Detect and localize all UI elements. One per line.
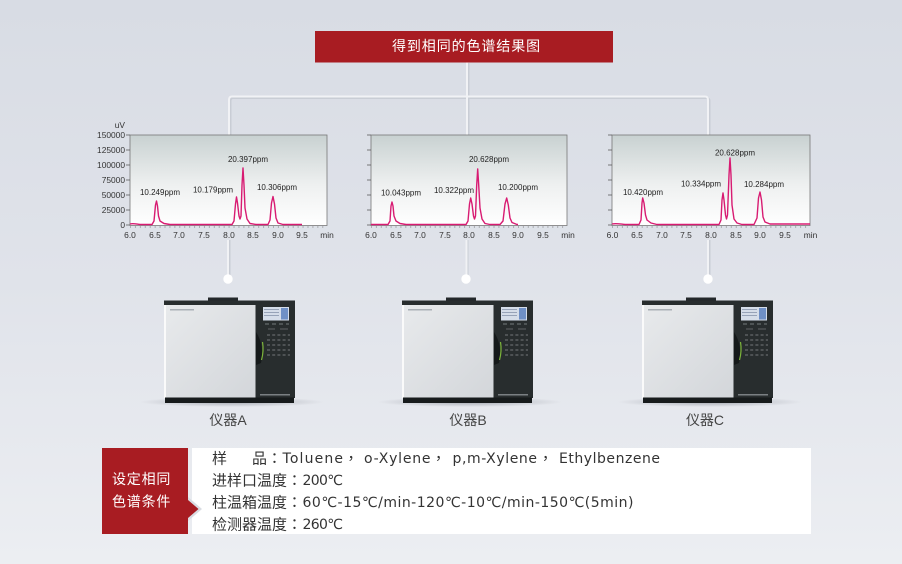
label B: 仪器B (449, 412, 487, 428)
chart B: min (561, 230, 575, 240)
chart C: 9.5 (779, 230, 791, 240)
instrument C (618, 298, 802, 407)
chart B: 10.322ppm (434, 186, 474, 195)
conditions rows: 260℃ (302, 517, 343, 533)
chart C: 9.0 (754, 230, 766, 240)
chart B: 8.0 (463, 230, 475, 240)
chart A: 10.249ppm (140, 188, 180, 197)
chart C (607, 135, 818, 240)
chart A: 8.0 (223, 230, 235, 240)
conditions rows: ， (431, 448, 446, 468)
chart C: 10.334ppm (681, 180, 721, 188)
title (315, 31, 613, 62)
chart A: 9.5 (296, 230, 308, 240)
chart A: 125000 (97, 145, 125, 155)
chart B: 9.0 (512, 230, 524, 240)
conditions rows: 检测器温度 (212, 516, 287, 534)
chart A: uV (115, 120, 125, 130)
chart A: 150000 (97, 130, 125, 140)
conditions rows: 品 (252, 450, 267, 468)
chart C: 20.628ppm (715, 148, 755, 158)
chart B (365, 135, 575, 240)
chart A: 100000 (97, 160, 125, 170)
conditions rows: ： (287, 470, 302, 490)
label A: 仪器A (209, 412, 247, 428)
chart B: 9.5 (537, 230, 549, 240)
conditions rows: 60℃-15℃/min-120℃-10℃/min-150℃(5min) (302, 495, 634, 511)
conditions rows: ， (344, 448, 359, 468)
chart C: min (804, 230, 818, 240)
conditions badge: 色谱条件 (112, 494, 171, 510)
chart B: 20.628ppm (469, 155, 509, 164)
conditions rows: ： (287, 492, 302, 512)
conditions rows: Ethylbenzene (559, 451, 660, 467)
chart A: 25000 (102, 205, 125, 215)
chart B: 6.5 (390, 230, 402, 240)
label C: 仪器C (686, 412, 724, 428)
conditions rows: 200℃ (302, 473, 343, 489)
conditions rows: 柱温箱温度 (212, 494, 287, 512)
chart A: 10.306ppm (257, 183, 297, 192)
title: 得到相同的色谱结果图 (392, 38, 541, 54)
instrument B (378, 298, 562, 407)
chart A: 0 (120, 220, 125, 230)
instrument A (140, 298, 324, 407)
conditions badge (102, 448, 202, 534)
chart A: 6.5 (149, 230, 161, 240)
chart C: 6.5 (631, 230, 643, 240)
chart B: 10.043ppm (381, 188, 421, 198)
panel: conditions (102, 448, 811, 534)
chart C: 8.5 (730, 230, 742, 240)
connector lines (223, 62, 713, 284)
conditions rows: ： (267, 448, 282, 468)
conditions badge: 设定相同 (112, 471, 171, 487)
conditions rows (212, 448, 660, 534)
chart C: 8.0 (705, 230, 717, 240)
chart A (97, 120, 334, 240)
chart B: 10.200ppm (498, 183, 538, 192)
chart A: 10.179ppm (193, 186, 233, 194)
chart B: 6.0 (365, 230, 377, 240)
conditions rows: 样 (212, 450, 227, 468)
chart A: 75000 (102, 175, 125, 185)
conditions rows: Toluene (282, 451, 343, 467)
chart C: 6.0 (607, 230, 619, 240)
conditions rows: ， (538, 448, 553, 468)
chart B: 8.5 (488, 230, 500, 240)
chart A: 9.0 (272, 230, 284, 240)
conditions text box (192, 448, 811, 534)
conditions rows: ： (287, 514, 302, 534)
chart B: 7.5 (439, 230, 451, 240)
chart C: 10.284ppm (744, 180, 784, 189)
chart C: 10.420ppm (623, 188, 663, 197)
chart B: 7.0 (414, 230, 426, 240)
chart A: 6.0 (124, 230, 136, 240)
chart A: 7.5 (198, 230, 210, 240)
chart A: min (320, 230, 334, 240)
conditions rows: o-Xylene (364, 451, 430, 467)
chart C: 7.0 (656, 230, 668, 240)
conditions rows: 进样口温度 (212, 472, 287, 490)
chart A: 20.397ppm (228, 155, 268, 164)
chart A: 7.0 (173, 230, 185, 240)
chart A: 8.5 (247, 230, 259, 240)
chart C: 7.5 (680, 230, 692, 240)
conditions rows: p,m-Xylene (452, 451, 537, 467)
chart A: 50000 (102, 190, 125, 200)
